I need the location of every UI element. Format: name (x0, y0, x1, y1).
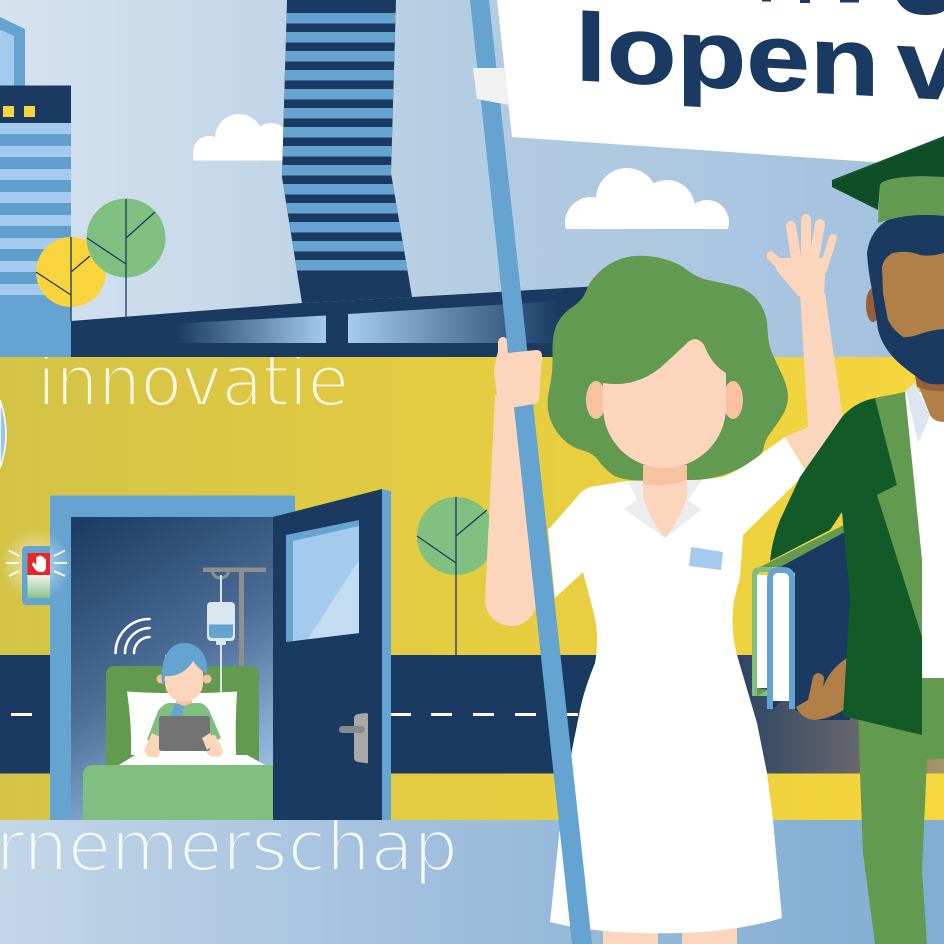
trousers (858, 677, 944, 944)
pages rear (757, 575, 769, 688)
raised arm and hand (771, 219, 850, 470)
background: road (0, 655, 944, 774)
tree yellow (36, 237, 106, 321)
cropped letters of the line above (762, 0, 944, 15)
jacket body (770, 398, 922, 735)
building left (0, 17, 71, 357)
ear (866, 288, 880, 322)
flag pole (470, 0, 592, 944)
mortarboard (832, 136, 944, 210)
person: man graduate, back parts (832, 136, 944, 944)
jacket lapel (875, 392, 922, 677)
icon: IV stand (203, 568, 266, 670)
background: lower blue band (0, 820, 944, 944)
book back cover (760, 525, 844, 567)
left edge circle fragment (0, 400, 6, 468)
face (603, 339, 726, 468)
face (882, 252, 944, 337)
bed headboard (106, 666, 259, 776)
shirt collar (906, 383, 930, 443)
cloud right (565, 168, 729, 229)
name tag (689, 547, 723, 570)
panel: hospital room doorway (50, 489, 391, 820)
background: yellow band (0, 357, 944, 820)
book green spine (752, 567, 772, 696)
dress (548, 437, 807, 933)
iv line over headboard (220, 645, 222, 693)
door frame (50, 496, 295, 820)
flag strap (473, 68, 509, 105)
pages front (773, 573, 789, 701)
heading word: innovatie: innovatie (37, 340, 349, 422)
room interior (71, 517, 276, 820)
neck (915, 377, 944, 422)
yellow gap behind sleeve (830, 512, 845, 530)
patient (144, 643, 223, 757)
book cover (780, 533, 850, 720)
icon: alarm device with hand (0, 529, 72, 605)
door panel (273, 489, 391, 820)
shirt (905, 392, 944, 678)
tower (282, 0, 412, 303)
nurse hand on pole (494, 337, 542, 408)
ears (586, 381, 743, 419)
hair and beard (867, 214, 944, 384)
tree by the door (417, 497, 495, 655)
hand holding books (796, 656, 850, 720)
person: nurse (485, 219, 850, 944)
blanket (83, 765, 276, 820)
flag banner (497, 0, 944, 167)
pillow (127, 692, 237, 755)
book blue spine (767, 567, 795, 709)
sheet (118, 755, 266, 766)
icon: wifi signal (116, 619, 150, 653)
collar (624, 481, 665, 538)
person: man graduate, jacket and books (752, 392, 922, 735)
bridge with windows (71, 286, 600, 357)
hair (548, 256, 788, 481)
legs (603, 925, 658, 944)
cloud left (193, 114, 284, 160)
arm holding pole (485, 395, 537, 626)
neck (643, 465, 687, 538)
tree green (86, 198, 166, 317)
cap band (878, 176, 944, 223)
background: sky (0, 0, 944, 358)
